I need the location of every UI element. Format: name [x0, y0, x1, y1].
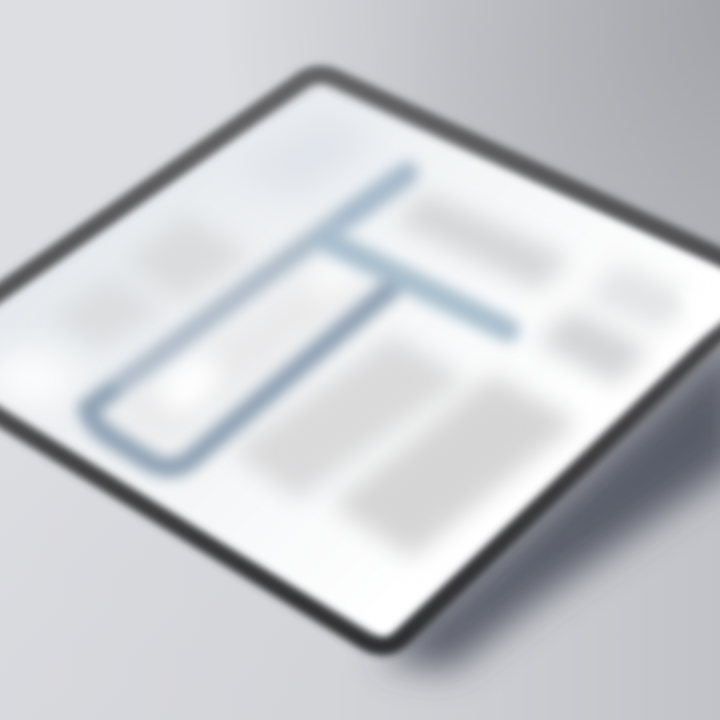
- left white highlight: [0, 350, 85, 405]
- cell: far left: [50, 275, 165, 350]
- cell: lower centre: [232, 335, 466, 500]
- bar: T crossbar: [322, 238, 508, 330]
- bar: top of diagonal: [345, 175, 405, 218]
- highlight: box upper end: [302, 248, 368, 306]
- bar: box lower edge: [88, 285, 395, 468]
- tablet frame: [0, 74, 720, 646]
- highlighted box interior: [115, 248, 372, 448]
- bar: long diagonal: [88, 172, 408, 408]
- screen top tint: [230, 110, 380, 200]
- right glare on screen edge: [680, 285, 720, 330]
- highlight: box lower end: [151, 348, 229, 422]
- cell: top right: [395, 192, 570, 290]
- cell: right middle: [538, 310, 650, 385]
- tablet drop shadow: [380, 330, 720, 670]
- cell: lower right: [332, 375, 578, 558]
- cell: upper left: [125, 215, 250, 300]
- tablet screen: [0, 88, 720, 640]
- cell: far right: [585, 262, 695, 332]
- content cells: [50, 192, 695, 558]
- bar: box left corner: [88, 392, 110, 408]
- blue outline and bars: [88, 172, 508, 468]
